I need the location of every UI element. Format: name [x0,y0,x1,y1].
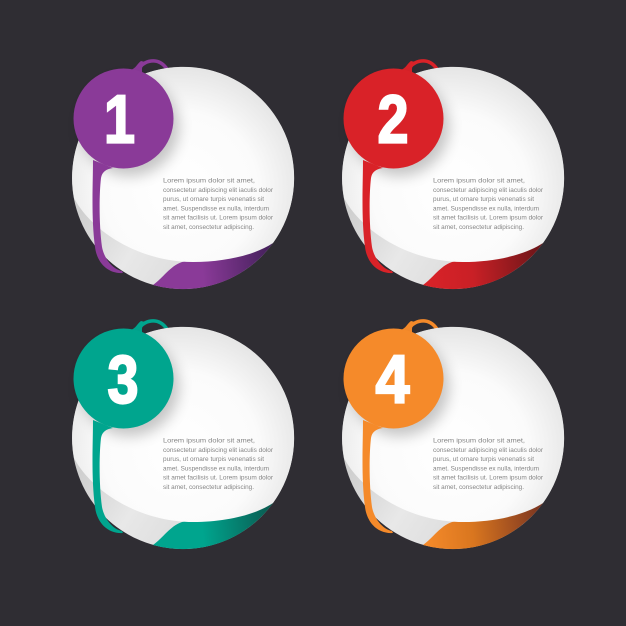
badge [344,328,444,428]
body text: consectetur adipiscing elit iaculis dolor [433,447,544,454]
badge shadow [81,78,179,176]
body text: amet. Suspendisse ex nulla, interdum [433,205,539,212]
ribbon band [153,243,273,289]
ribbon tail [92,160,123,273]
body text: consectetur adipiscing elit iaculis dolor [163,187,274,194]
disc base [342,327,564,549]
body text: purus, ut ornare turpis venenatis sit [433,456,534,463]
number 4: 4 [376,340,410,417]
body text: sit amet facilisis ut. Lorem ipsum dolor [163,215,274,222]
body text: sit amet, consectetur adipiscing. [433,484,524,491]
loop: purple top ring [131,61,168,76]
ribbon band [153,503,273,549]
loop: orange top ring [401,321,438,336]
body text: sit amet facilisis ut. Lorem ipsum dolor [433,215,544,222]
ribbon tail [92,420,123,533]
body text: consectetur adipiscing elit iaculis dolor [163,447,274,454]
badge [74,328,174,428]
panel: step 2 [342,61,564,289]
disc top surface [342,67,564,262]
ribbon band [423,503,543,549]
body text: sit amet facilisis ut. Lorem ipsum dolor [163,475,274,482]
body text: amet. Suspendisse ex nulla, interdum [163,465,269,472]
badge shadow [351,78,449,176]
disc base [72,327,294,549]
badge [74,68,174,168]
disc top surface [72,327,294,522]
panel: step 4 [342,321,564,549]
disc top surface [72,67,294,262]
number 1: 1 [104,82,135,158]
panel: step 3 [72,321,294,549]
body text: sit amet facilisis ut. Lorem ipsum dolor [433,475,544,482]
disc top surface [342,327,564,522]
body text: purus, ut ornare turpis venenatis sit [433,196,534,203]
body text: sit amet, consectetur adipiscing. [163,224,254,231]
ribbon tail [362,160,393,273]
body text: Lorem ipsum dolor sit amet, [163,178,255,184]
body text: sit amet, consectetur adipiscing. [433,224,524,231]
badge [344,68,444,168]
loop: red top ring [401,61,438,76]
panel: step 1 [72,61,294,289]
badge shadow [351,338,449,436]
body text: amet. Suspendisse ex nulla, interdum [433,465,539,472]
body text: Lorem ipsum dolor sit amet, [433,438,525,444]
ribbon band [423,243,543,289]
body text: Lorem ipsum dolor sit amet, [163,438,255,444]
body text: sit amet, consectetur adipiscing. [163,484,254,491]
ribbon tail [362,420,393,533]
disc base [342,67,564,289]
body text: amet. Suspendisse ex nulla, interdum [163,205,269,212]
body text: Lorem ipsum dolor sit amet, [433,178,525,184]
number 2: 2 [378,82,409,158]
badge shadow [81,338,179,436]
body text: purus, ut ornare turpis venenatis sit [163,456,264,463]
disc base [72,67,294,289]
number 3: 3 [108,342,139,418]
body text: purus, ut ornare turpis venenatis sit [163,196,264,203]
loop: teal top ring [131,321,168,336]
body text: consectetur adipiscing elit iaculis dolor [433,187,544,194]
